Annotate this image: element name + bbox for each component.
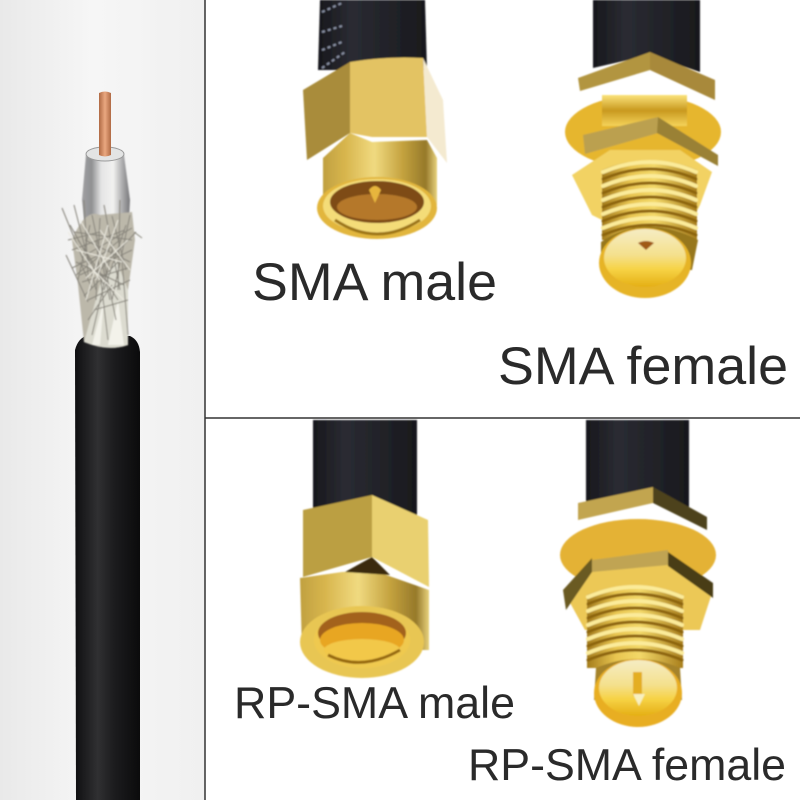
panel: coaxial cable photo [0,0,205,800]
icon: threaded body [602,160,697,240]
icon: washer [560,519,716,591]
label: SMA female: SMA female [498,337,788,396]
icon: second hex nut [583,117,718,166]
icon: flange [563,552,713,630]
icon: dielectric end [86,147,124,161]
icon: foil dielectric [82,155,130,240]
icon: upper threads [602,95,687,126]
panel: SMA male connector [303,0,447,239]
icon: black cable jacket [75,335,140,800]
icon: collar [323,133,437,205]
icon: black cable [593,0,700,72]
icon: washer [565,95,721,169]
icon: hex nut [303,495,429,587]
icon: black cable [586,420,689,510]
icon: copper centre conductor [99,92,111,156]
icon: top hex nut [578,487,707,530]
icon: hex nut [303,58,447,163]
icon: black cable [313,420,417,515]
icon: second hex nut [563,550,713,610]
icon: threaded ring [300,606,424,678]
icon: top hex nut [578,52,715,100]
label: RP-SMA female: RP-SMA female [468,741,786,790]
icon: threaded body [587,585,683,668]
icon: collar [300,570,429,650]
panel: SMA female connector [565,0,721,298]
icon: flange [572,150,712,225]
label: SMA male: SMA male [252,253,497,312]
label: RP-SMA male: RP-SMA male [234,679,515,728]
panel: RP-SMA female connector [560,420,716,727]
icon: centre pin [369,186,381,203]
icon: braided shield [62,200,142,348]
icon: black cable [318,0,427,70]
icon: socket tip with pin [594,659,682,727]
icon: socket tip [599,226,698,298]
panel: RP-SMA male connector [300,420,429,678]
icon: coupling ring [317,177,437,239]
